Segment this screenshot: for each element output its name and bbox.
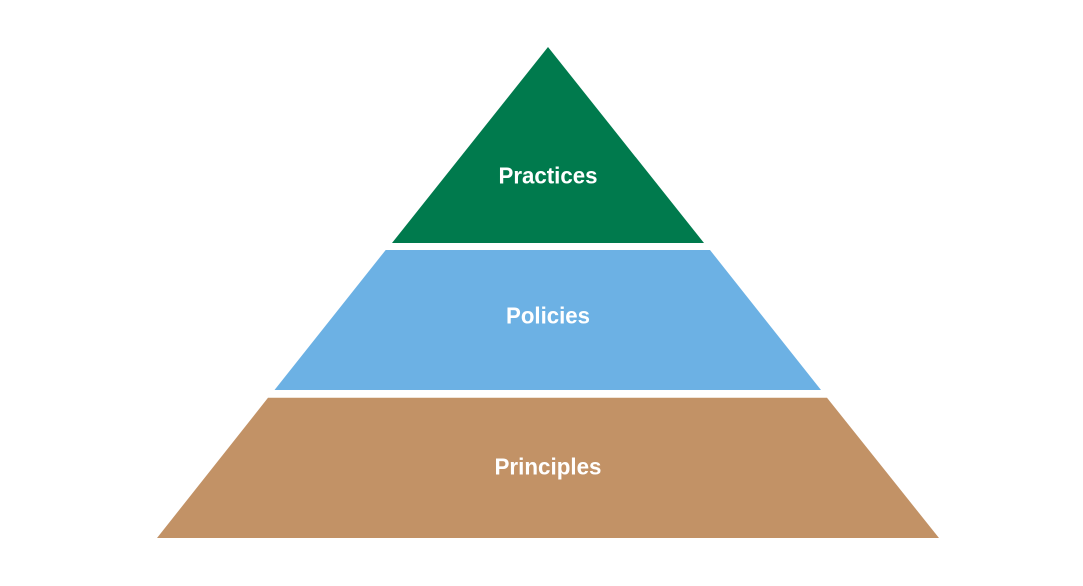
panel: principles tier: [157, 398, 939, 538]
panel: policies tier: Policies: [506, 302, 590, 328]
panel: policies tier: [274, 250, 821, 390]
panel: practices tier: [392, 47, 704, 243]
panel: principles tier: Principles: [494, 454, 602, 480]
panel: practices tier: Practices: [498, 162, 598, 188]
